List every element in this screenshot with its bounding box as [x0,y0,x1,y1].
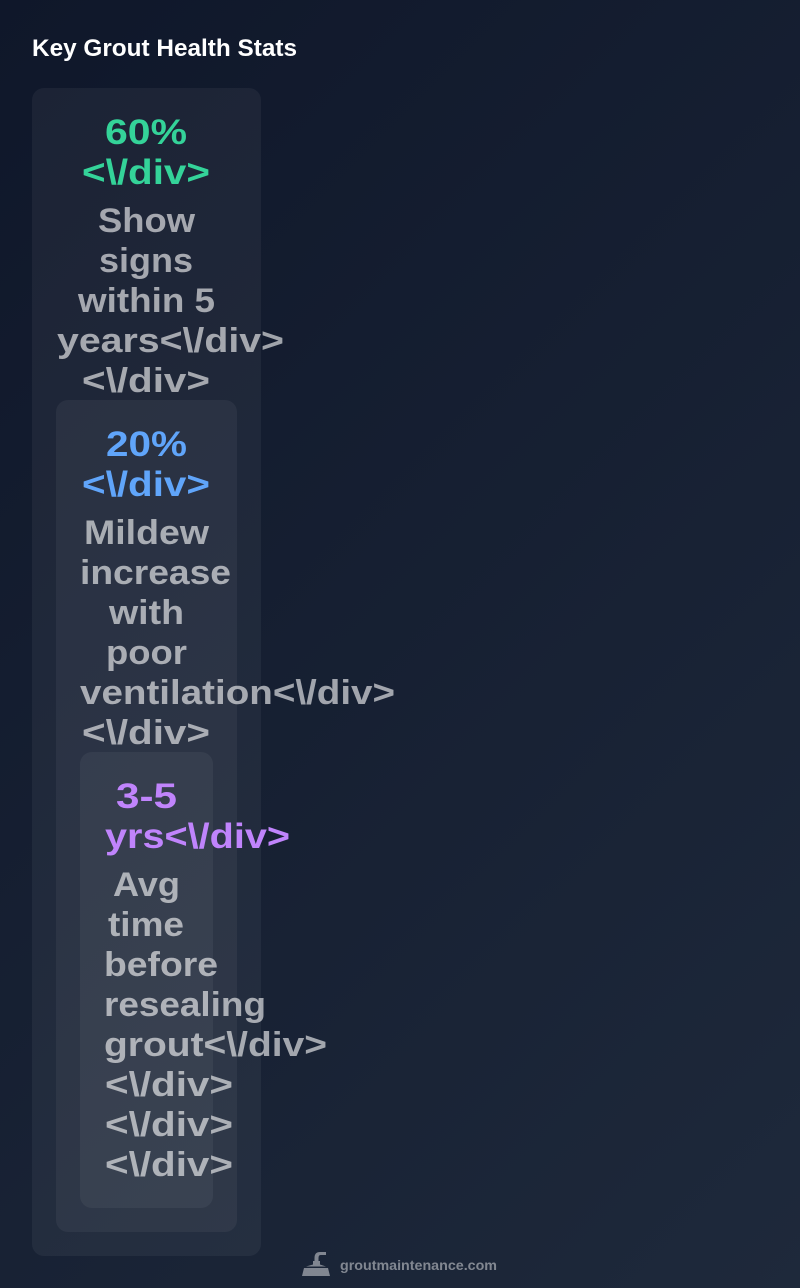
stat description: avg time before resealing grout: <\/div> [105,1146,233,1184]
stat value: 20%: <\/div> [82,465,210,504]
stat description: avg time before resealing grout: before [104,946,218,984]
stat description: show signs within 5 years: Show [98,202,196,240]
title: Key Grout Health Stats [32,35,297,62]
stat value: 3-5 yrs: yrs<\/div> [105,817,290,856]
stat value: 60% [82,113,210,192]
stat description: avg time before resealing grout: time [108,906,184,944]
stat value: 20% [82,425,210,504]
stat description: mildew increase with poor ventilation: with [108,594,184,632]
stat description: avg time before resealing grout: resealing [104,986,266,1024]
stat value: 3-5 yrs [105,777,290,856]
stat description: avg time before resealing grout: grout<\/div> [104,1026,327,1064]
stat description: show signs within 5 years [57,202,284,400]
stat value: 3-5 yrs: 3-5 [116,777,177,816]
footer: brand [302,1252,497,1276]
stat description: mildew increase with poor ventilation: poor [106,634,187,672]
stat description: show signs within 5 years: <\/div> [82,362,210,400]
panel: middle stat card [56,400,395,1232]
stat description: mildew increase with poor ventilation: <\/div> [82,714,210,752]
stat description: avg time before resealing grout [104,866,327,1184]
stat description: show signs within 5 years: years<\/div> [57,322,284,360]
stat value: 60%: <\/div> [82,153,210,192]
footer url: groutmaintenance.com [340,1257,497,1273]
stat description: mildew increase with poor ventilation [80,514,395,752]
stat description: show signs within 5 years: within 5 [77,282,215,320]
panel: outer stat card [32,88,395,1256]
stat description: mildew increase with poor ventilation: increase [80,554,231,592]
icon: grout float [302,1252,330,1276]
stat description: mildew increase with poor ventilation: ventilation<\/div> [80,674,395,712]
panel: inner stat card [80,752,327,1208]
stat description: show signs within 5 years: signs [99,242,193,280]
stat description: avg time before resealing grout: Avg [113,866,180,904]
stat description: mildew increase with poor ventilation: Mildew [84,514,210,552]
stat description: avg time before resealing grout: <\/div> [105,1106,233,1144]
stat description: avg time before resealing grout: <\/div> [105,1066,233,1104]
stat value: 60%: 60% [105,113,187,152]
stat value: 20%: 20% [106,425,187,464]
